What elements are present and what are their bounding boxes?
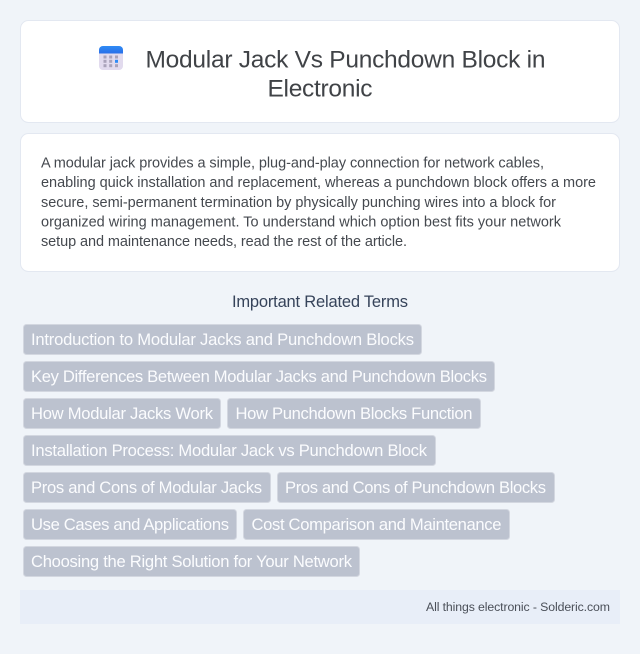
tag list: related terms: Key Differences Between Modular Jacks and Punchdown Blocks: [31, 367, 487, 386]
heading: important related terms: Important Related Terms: [232, 293, 408, 311]
footer: [20, 590, 620, 624]
panel: title header: [20, 20, 620, 122]
text block: introduction paragraph: A modular jack provides a simple, plug-and-play connection for network cables,: [41, 156, 544, 172]
tag list: related terms: Use Cases and Applications: [31, 515, 229, 534]
icon: calendar: [99, 46, 123, 70]
tag list: related terms: How Punchdown Blocks Function: [236, 404, 472, 423]
tag list: related terms: Cost Comparison and Maintenance: [252, 515, 502, 534]
text block: introduction paragraph: enabling quick installation and replacement, whereas a punchdown block offers a more: [41, 175, 596, 191]
footer: All things electronic - Solderic.com: [426, 600, 610, 614]
title: Electronic: [268, 76, 372, 102]
tag list: related terms: Introduction to Modular Jacks and Punchdown Blocks: [31, 330, 414, 349]
tag list: related terms: Installation Process: Modular Jack vs Punchdown Block: [31, 441, 428, 460]
tag list: related terms: Pros and Cons of Punchdown Blocks: [285, 478, 546, 497]
tag list: related terms: [24, 324, 554, 576]
title: [146, 46, 546, 102]
tag list: related terms: How Modular Jacks Work: [31, 404, 214, 423]
text block: introduction paragraph: setup and maintenance needs, read the rest of the article.: [41, 234, 407, 250]
title: Modular Jack Vs Punchdown Block in: [146, 46, 546, 74]
text block: introduction paragraph: [41, 156, 596, 250]
text block: introduction paragraph: organized wiring management. To understand which option best fits your network: [41, 214, 562, 230]
panel: introduction: [20, 134, 620, 272]
text block: introduction paragraph: secure, semi-permanent termination by physically punching wires into a block for: [41, 195, 556, 211]
tag list: related terms: Choosing the Right Solution for Your Network: [31, 552, 353, 571]
tag list: related terms: Pros and Cons of Modular Jacks: [31, 478, 262, 497]
